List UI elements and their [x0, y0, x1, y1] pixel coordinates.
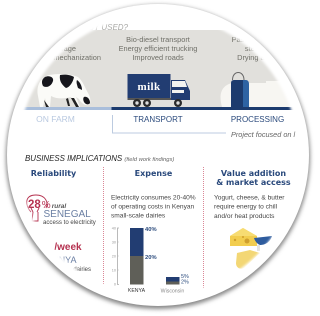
icon: milk truck: milk — [138, 81, 161, 93]
value addition description: require energy to chill — [214, 204, 278, 210]
stage bar: on farm — [20, 107, 112, 110]
stage label: on farm: ON FARM — [36, 114, 75, 124]
icon: processing tank — [231, 72, 249, 107]
bar chart: electricity share of costs: Wisconsin — [161, 288, 184, 294]
value addition description: and/or heat products — [214, 213, 275, 220]
bar chart: electricity share of costs: 30 — [112, 240, 116, 244]
reliability heading: Reliability — [31, 169, 77, 178]
access caption: access to electricity — [43, 219, 97, 226]
icon: cow — [37, 74, 90, 107]
bar chart: electricity share of costs: 40 — [112, 226, 116, 230]
panel: energy use band — [25, 30, 278, 107]
transport energy uses text: Improved roads — [132, 53, 184, 62]
on-farm energy uses text — [54, 47, 100, 60]
stage label: processing: PROCESSING — [231, 115, 284, 124]
panel: value addition — [214, 169, 291, 269]
processing energy uses text — [232, 37, 263, 62]
value addition description — [214, 194, 285, 220]
bar chart: electricity share of costs: 20% — [145, 255, 157, 261]
processing energy uses text: steam — [245, 44, 265, 53]
icon: light bulb — [27, 195, 47, 221]
section question heading: HOW IS ENERGY USED? — [34, 23, 129, 32]
transport energy uses text: Bio-diesel transport — [126, 35, 190, 44]
panel: expense — [111, 169, 196, 294]
stat: 28 percent rural: 28%rural — [28, 199, 66, 211]
processing energy uses text: Drying and — [237, 53, 273, 62]
icon: blue bowl — [254, 236, 272, 251]
transport energy uses text: Energy efficient trucking — [119, 44, 197, 53]
value addition heading: Value addition — [221, 169, 286, 178]
transport energy uses text — [119, 35, 197, 62]
bar chart: electricity share of costs: 10 — [112, 268, 116, 272]
expense description: Electricity consumes 20-40% — [111, 194, 196, 202]
expense description: of operating costs in Kenyan — [111, 204, 195, 210]
expense heading: Expense — [135, 169, 173, 178]
panel: reliability — [27, 169, 97, 273]
bar chart: electricity share of costs — [112, 226, 189, 294]
on-farm energy uses text: Storage — [50, 44, 76, 53]
business implications heading: BUSINESS IMPLICATIONS (field work findings) — [25, 154, 174, 163]
icon: cheese block — [230, 228, 257, 246]
clipped content — [10, 23, 306, 294]
on-farm energy uses text: Farm mechanization — [34, 53, 101, 62]
stat: outages per week: /week — [54, 242, 82, 253]
bar chart: electricity share of costs: 0 — [114, 282, 116, 286]
expense description: small-scale dairies — [111, 212, 166, 220]
stage bar: transport and processing — [112, 107, 302, 110]
country label: Senegal: SENEGAL — [44, 209, 91, 220]
column divider right — [203, 167, 204, 288]
country label: Kenya: KENYA — [47, 255, 76, 265]
market access heading: & market access — [216, 178, 291, 187]
bar chart: electricity share of costs: 20 — [112, 254, 116, 258]
icon: milk truck — [128, 74, 190, 107]
stage label: transport: TRANSPORT — [133, 115, 183, 124]
white processing silhouette — [220, 81, 290, 107]
project scope note: Project focused on l — [231, 130, 295, 139]
outage caption: dairies — [73, 267, 91, 273]
expense description — [111, 195, 196, 218]
bar chart: electricity share of costs: 40% — [145, 227, 157, 233]
column divider left — [103, 167, 104, 284]
icon: butter wedge — [236, 250, 260, 269]
project scope bracket — [112, 115, 226, 133]
bar chart: electricity share of costs: 2% — [181, 280, 189, 286]
value addition description: Yogurt, cheese, & butter — [214, 194, 285, 202]
bar chart: electricity share of costs: KENYA — [128, 288, 146, 294]
bar chart: electricity share of costs: 5% — [181, 274, 189, 280]
processing energy uses text: Pasteurization — [232, 35, 278, 44]
